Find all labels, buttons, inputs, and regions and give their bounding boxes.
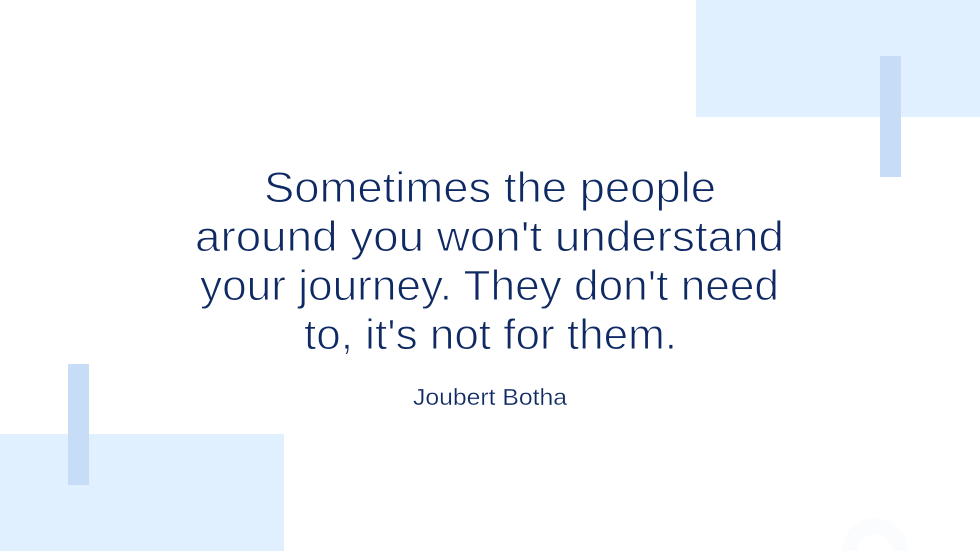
quote text: to, it's not for them. xyxy=(304,311,677,359)
quote text: Sometimes the people xyxy=(264,164,716,212)
quote text: around you won't understand xyxy=(195,213,784,261)
faint arc: bottom right xyxy=(842,518,908,551)
attribution: Joubert Botha xyxy=(413,384,567,410)
panel: top right light blue block xyxy=(696,0,980,117)
panel: bottom left light blue block xyxy=(0,434,284,551)
quote text xyxy=(195,164,784,359)
accent bar: top right xyxy=(880,56,901,177)
accent bar: bottom left xyxy=(68,364,89,485)
quote text: your journey. They don't need xyxy=(200,262,779,310)
